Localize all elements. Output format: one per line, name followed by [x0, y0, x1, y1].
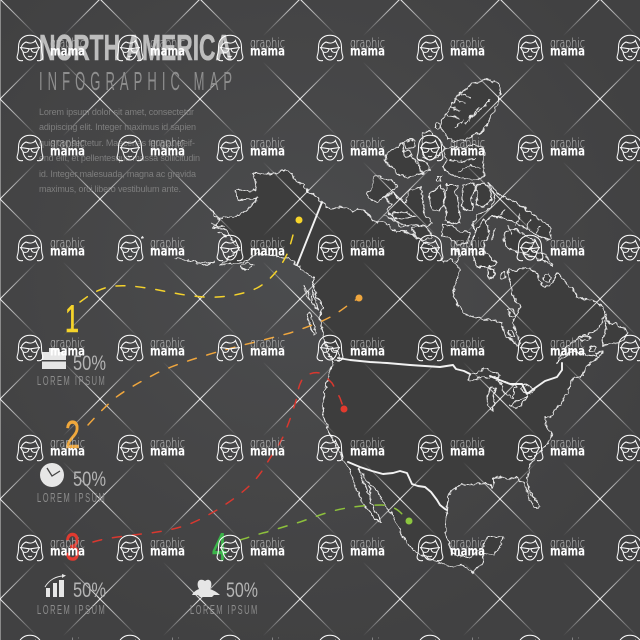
stat 1 — [37, 348, 106, 389]
dashed route 3 — [93, 373, 348, 542]
number 1: 1 — [65, 298, 79, 341]
coastlines and islands — [142, 79, 628, 573]
Baffin west lobes — [462, 183, 492, 210]
Coast inlets — [385, 215, 460, 262]
dashed route 4 — [240, 505, 412, 540]
dashed route 2 — [88, 294, 362, 425]
stat 4 — [190, 579, 258, 618]
Axel Heiberg and small island — [435, 122, 440, 129]
Cornwallis group — [422, 131, 444, 160]
Victoria Island — [385, 187, 432, 227]
USA Mexico border — [348, 462, 447, 510]
St Lawrence and Great Lakes border — [490, 363, 562, 394]
Kodiak and Aleutian dots — [142, 208, 226, 255]
Baja inner — [369, 486, 371, 497]
USA Canada border — [338, 358, 470, 374]
stat 3 — [37, 574, 106, 618]
Baffin fjord strokes — [492, 210, 540, 240]
Baffin Island — [472, 183, 551, 240]
Gulf islands — [578, 336, 603, 357]
stat 2 — [37, 463, 106, 506]
icon: briefcase — [42, 348, 66, 369]
Newfoundland — [602, 315, 628, 345]
Alaska Peninsula chain — [175, 258, 254, 269]
intro text block: maximus, orci libero vestibulum ante. — [39, 184, 181, 194]
title: NORTH AMERICA — [39, 27, 232, 68]
dashed route 1 — [80, 216, 302, 302]
Puget detail — [326, 345, 340, 361]
number 4: 4 — [212, 526, 227, 569]
Central Arctic mainland peninsulas — [392, 212, 470, 245]
Banks Island — [367, 175, 397, 202]
Great Lakes — [468, 368, 535, 410]
Alaska Yukon border — [297, 202, 322, 265]
intro text block: quis consectetur. Maecenas feugiat eleif- — [39, 138, 195, 148]
Ellesmere fjords — [447, 93, 490, 128]
icon: people — [192, 580, 220, 597]
stat 4: 50% — [226, 579, 258, 602]
stat 3: LOREM IPSUM — [37, 604, 105, 618]
Ellesmere Island — [441, 79, 500, 142]
Southampton Island area — [472, 220, 497, 267]
King William and Somerset islands — [429, 176, 460, 224]
intro text block: Lorem ipsum dolor sit amet, consectetur — [39, 107, 194, 117]
number 2: 2 — [65, 414, 80, 457]
map: North America — [142, 79, 628, 573]
subtitle: INFOGRAPHIC MAP — [39, 67, 232, 96]
stat 2: 50% — [73, 468, 106, 491]
stat 1: 50% — [73, 352, 106, 375]
icon: bar chart with arrow — [45, 574, 66, 597]
Melville and Parry islands — [385, 143, 423, 178]
intro text block: id. Integer malesuada, magna ac gravida — [39, 169, 196, 179]
stat 3: 50% — [73, 579, 106, 602]
James Bay and Hudson Bay islands — [488, 268, 551, 337]
intro text block: adipiscing elit. Integer maximus id sapien — [39, 122, 196, 132]
Parry small islands — [402, 139, 430, 172]
stat 4: LOREM IPSUM — [190, 604, 257, 618]
icon: clock — [40, 463, 64, 487]
Devon inner channels — [450, 158, 480, 172]
Devon and Queen Elizabeth islands — [443, 145, 485, 180]
stat 2: LOREM IPSUM — [37, 492, 105, 506]
mainland outline — [213, 170, 605, 573]
Vancouver and coastal islands — [304, 285, 318, 335]
intro text block — [39, 107, 200, 194]
intro text block: end elit, et pellentesque massa sollicitudin — [39, 153, 200, 163]
stat 1: LOREM IPSUM — [37, 375, 105, 389]
number 3: 3 — [65, 526, 80, 569]
Baffin south — [504, 229, 553, 266]
